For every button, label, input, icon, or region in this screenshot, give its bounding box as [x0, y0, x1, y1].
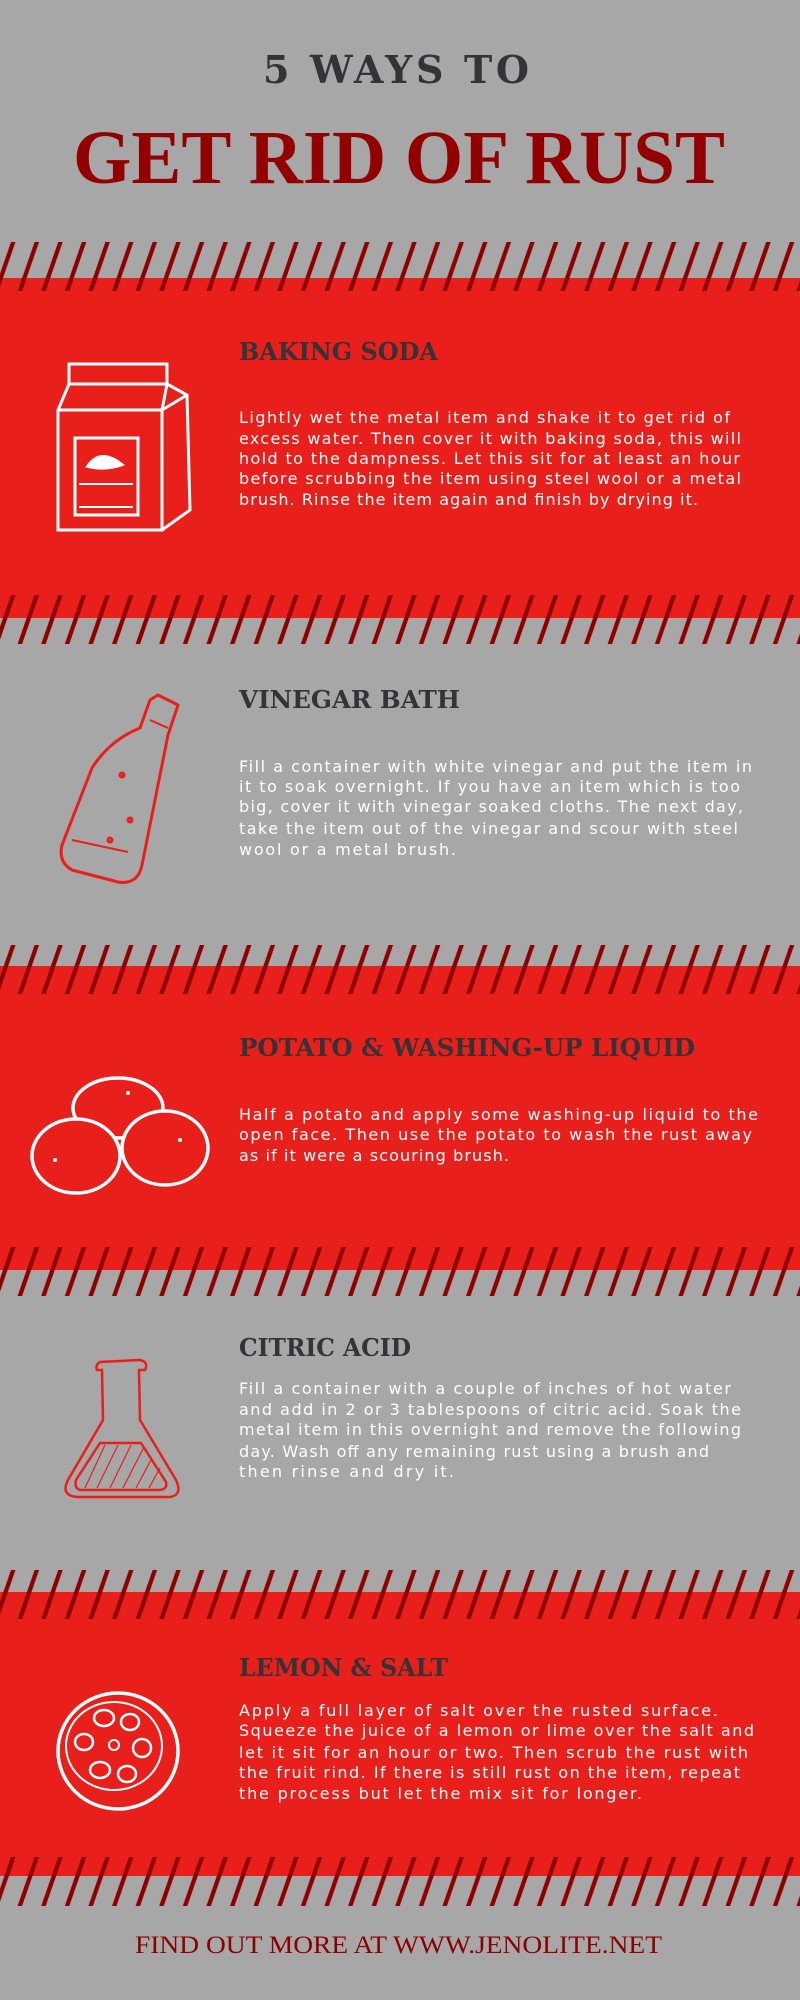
- text: lemon & salt: the process but let the mix sit for longer.: [239, 1784, 642, 1803]
- text: potato: as if it were a scouring brush.: [239, 1146, 509, 1165]
- icon: baking soda box: [58, 364, 190, 530]
- text: citric acid: Fill a container with a couple of inches of hot water: [239, 1379, 731, 1398]
- text: vinegar bath: it to soak overnight. If you have an item which is too: [239, 777, 740, 796]
- text: lemon & salt: Squeeze the juice of a lemon or lime over the salt and: [239, 1721, 754, 1740]
- icon: potatoes: [32, 1078, 208, 1193]
- icon: lemon: [58, 1693, 178, 1809]
- red panels background: [0, 278, 800, 1876]
- heading: baking soda: BAKING SODA: [239, 337, 438, 366]
- title: 5 WAYS TO: [263, 47, 529, 92]
- text: potato: open face. Then use the potato to wash the rust away: [239, 1125, 752, 1144]
- text: vinegar bath: take the item out of the vinegar and scour with steel: [239, 819, 738, 838]
- text: baking soda: Lightly wet the metal item and shake it to get rid of: [239, 408, 730, 427]
- text: vinegar bath: big, cover it with vinegar soaked cloths. The next day,: [239, 797, 743, 816]
- text: potato: Half a potato and apply some washing-up liquid to the: [239, 1105, 758, 1124]
- heading: potato: POTATO & WASHING-UP LIQUID: [239, 1033, 695, 1062]
- text: baking soda: before scrubbing the item using steel wool or a metal: [239, 469, 741, 488]
- text: lemon & salt: the fruit rind. If there is still rust on the item, repeat: [239, 1763, 740, 1782]
- text: baking soda: excess water. Then cover it with baking soda, this will: [239, 429, 741, 448]
- text: vinegar bath: Fill a container with white vinegar and put the item in: [239, 757, 752, 776]
- text: citric acid: day. Wash off any remaining rust using a brush and: [239, 1442, 709, 1461]
- heading: lemon & salt: LEMON & SALT: [239, 1653, 448, 1682]
- title: [73, 47, 725, 200]
- title: GET RID OF RUST: [73, 116, 725, 200]
- heading: vinegar bath: VINEGAR BATH: [238, 685, 460, 714]
- icon: flask: [66, 1360, 178, 1497]
- icon: vinegar bottle: [61, 695, 178, 882]
- text: citric acid: then rinse and dry it.: [239, 1462, 454, 1481]
- text: citric acid: metal item in this overnight and remove the following: [239, 1420, 741, 1439]
- text: vinegar bath: [239, 757, 752, 859]
- heading: citric acid: CITRIC ACID: [239, 1333, 411, 1362]
- text: baking soda: brush. Rinse the item again and finish by drying it.: [239, 490, 698, 509]
- footer: FIND OUT MORE AT WWW.JENOLITE.NET: [135, 1932, 662, 1959]
- text: vinegar bath: wool or a metal brush.: [239, 840, 456, 859]
- text: potato: [239, 1105, 758, 1165]
- text: baking soda: [239, 408, 741, 509]
- text: baking soda: hold to the dampness. Let this sit for at least an hour: [239, 449, 740, 468]
- text: lemon & salt: [239, 1701, 754, 1803]
- text: lemon & salt: let it sit for an hour or two. Then scrub the rust with: [239, 1743, 748, 1762]
- text: citric acid: [239, 1379, 741, 1481]
- text: lemon & salt: Apply a full layer of salt over the rusted surface.: [239, 1701, 718, 1720]
- text: citric acid: and add in 2 or 3 tablespoons of citric acid. Soak the: [239, 1400, 741, 1419]
